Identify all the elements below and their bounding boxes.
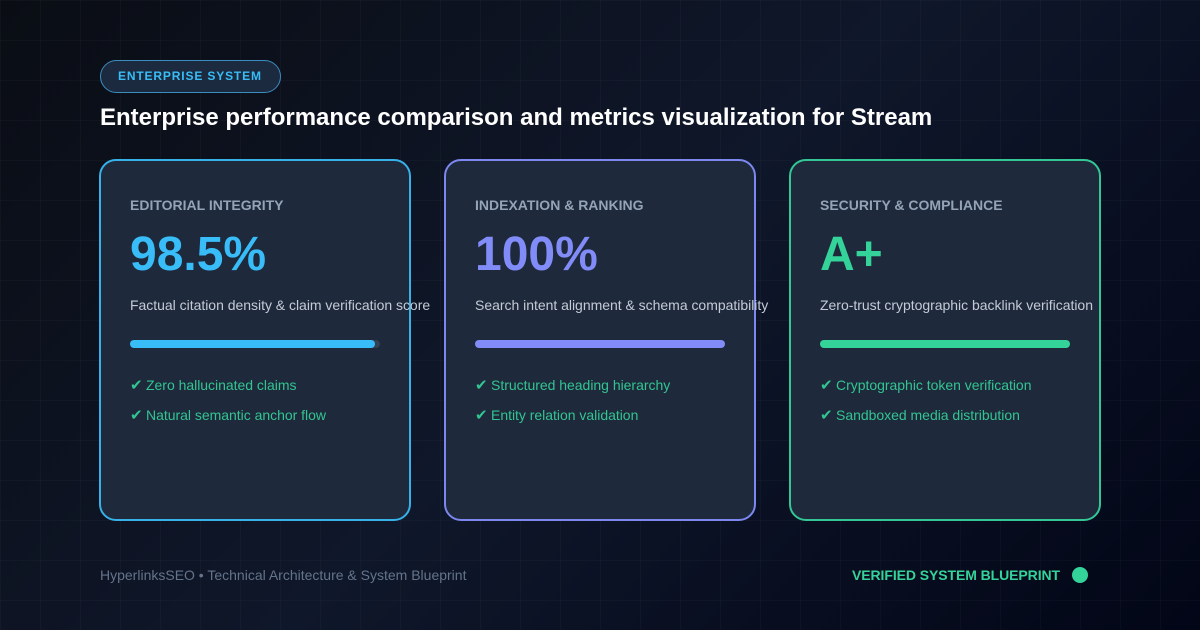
status dot xyxy=(1072,567,1088,583)
panel: editorial integrity xyxy=(99,159,411,521)
card label: EDITORIAL INTEGRITY xyxy=(130,197,284,213)
metric value: 98.5% xyxy=(130,228,266,281)
check item: Zero hallucinated claims xyxy=(146,377,296,393)
title: Enterprise performance comparison and metrics visualization for Stream xyxy=(100,104,932,131)
check item: ✔ xyxy=(475,376,488,394)
metric value: A+ xyxy=(820,228,883,281)
progress bar xyxy=(130,340,380,348)
progress bar xyxy=(475,340,725,348)
check item: ✔ xyxy=(820,406,833,424)
check item: ✔ xyxy=(130,406,143,424)
card label: INDEXATION & RANKING xyxy=(475,197,644,213)
metric value: 100% xyxy=(475,228,598,281)
check item: ✔ xyxy=(475,406,488,424)
badge xyxy=(100,60,281,93)
check item: Natural semantic anchor flow xyxy=(146,407,326,423)
check item: Structured heading hierarchy xyxy=(491,377,670,393)
panel: indexation and ranking xyxy=(444,159,756,521)
card label: SECURITY & COMPLIANCE xyxy=(820,197,1003,213)
verified label: VERIFIED SYSTEM BLUEPRINT xyxy=(852,567,1060,583)
check item: ✔ xyxy=(820,376,833,394)
description: Zero-trust cryptographic backlink verification xyxy=(820,297,1093,313)
badge: ENTERPRISE SYSTEM xyxy=(118,69,262,83)
check item: Cryptographic token verification xyxy=(836,377,1031,393)
description: Factual citation density & claim verification score xyxy=(130,297,430,313)
check item: Entity relation validation xyxy=(491,407,638,423)
panel: security and compliance xyxy=(789,159,1101,521)
progress bar xyxy=(820,340,1070,348)
description: Search intent alignment & schema compatibility xyxy=(475,297,768,313)
check item: Sandboxed media distribution xyxy=(836,407,1020,423)
check item: ✔ xyxy=(130,376,143,394)
footer text: HyperlinksSEO • Technical Architecture & System Blueprint xyxy=(100,567,466,583)
